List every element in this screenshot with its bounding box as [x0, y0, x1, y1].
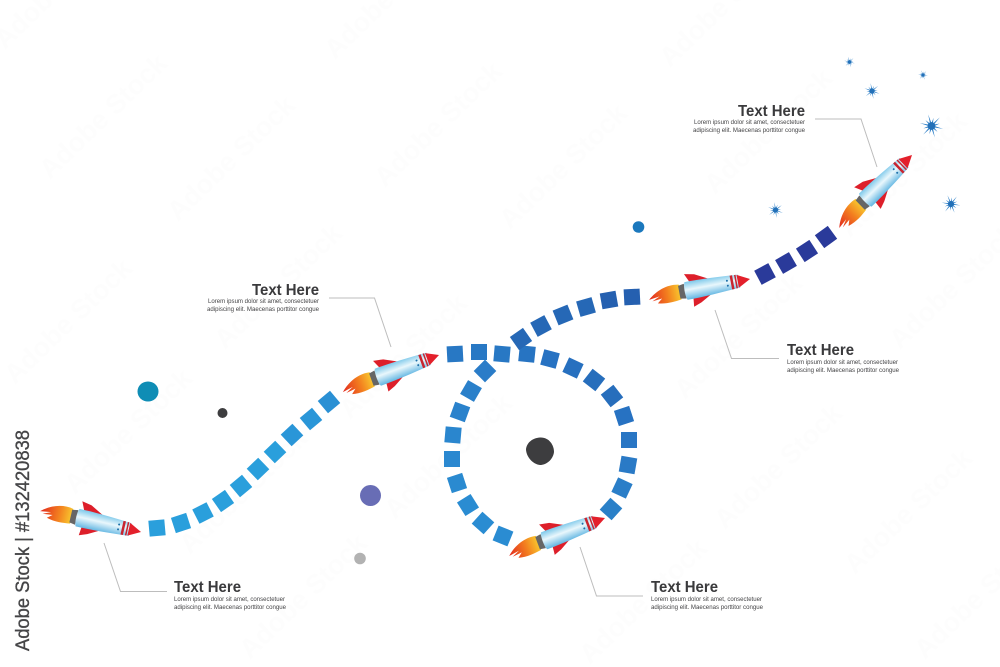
watermark pattern: Adobe Stock [668, 267, 809, 404]
callout: rocket 1 [104, 543, 286, 611]
watermark pattern: Adobe Stock [833, 105, 974, 242]
stars [765, 56, 962, 219]
callout: rocket 1: adipiscing elit. Maecenas porttitor congue [174, 604, 286, 611]
watermark pattern: Adobe Stock [233, 527, 374, 664]
planet dots [138, 221, 644, 564]
rocket 3 [503, 502, 611, 570]
callout: rocket 2: Lorem ipsum dolor sit amet, consectetuer [208, 298, 320, 305]
callout: rocket 1: Lorem ipsum dolor sit amet, consectetuer [174, 596, 286, 603]
callout: rocket 3: adipiscing elit. Maecenas porttitor congue [651, 604, 763, 611]
callout: rocket 4: Text Here [787, 342, 854, 359]
callout: rocket 4: Lorem ipsum dolor sit amet, consectetuer [787, 359, 899, 366]
watermark pattern: Adobe Stock [708, 397, 849, 534]
callout: rocket 2 [207, 282, 391, 347]
rocket 4 [646, 262, 753, 315]
callout: rocket 2: Text Here [252, 282, 319, 299]
watermark pattern: Adobe Stock [58, 362, 199, 499]
callout: rocket 3 [580, 547, 763, 611]
watermark pattern: Adobe Stock [333, 287, 474, 424]
watermark pattern: Adobe Stock [838, 442, 979, 579]
callout: rocket 2: adipiscing elit. Maecenas porttitor congue [207, 306, 319, 313]
dashed path: final segment [754, 226, 837, 285]
watermark pattern: Adobe Stock [208, 217, 349, 354]
side credit text: Adobe Stock | #132420838 [12, 430, 34, 651]
callout: rocket 1: Text Here [174, 579, 241, 596]
watermark pattern: Adobe Stock [493, 97, 634, 234]
watermark pattern: Adobe Stock [378, 387, 519, 524]
callout: rocket 4 [715, 310, 899, 374]
watermark pattern: Adobe Stock [0, 252, 139, 389]
callout: rocket 5: Lorem ipsum dolor sit amet, consectetuer [694, 119, 806, 126]
callout: rocket 3: Text Here [651, 579, 718, 596]
rocket 1 [37, 493, 145, 549]
watermark pattern: Adobe Stock [698, 62, 839, 199]
callout: rocket 5: Text Here [738, 103, 805, 120]
watermark pattern: Adobe Stock [173, 422, 314, 559]
watermark pattern: Adobe Stock [368, 55, 509, 192]
dashed path: start segment [148, 391, 340, 537]
watermark pattern: Adobe Stock [161, 89, 302, 226]
watermark pattern: Adobe Stock [573, 532, 714, 667]
callout: rocket 5 [693, 103, 877, 167]
callout: rocket 4: adipiscing elit. Maecenas porttitor congue [787, 367, 899, 374]
dashed path: loop segment [444, 344, 637, 546]
watermark pattern: Adobe Stock [33, 47, 174, 184]
callout: rocket 5: adipiscing elit. Maecenas porttitor congue [693, 127, 805, 134]
rocket 2 [336, 339, 445, 406]
rocket 5 [826, 143, 924, 239]
callout: rocket 3: Lorem ipsum dolor sit amet, consectetuer [651, 596, 763, 603]
dashed path: upper segment [510, 289, 640, 350]
